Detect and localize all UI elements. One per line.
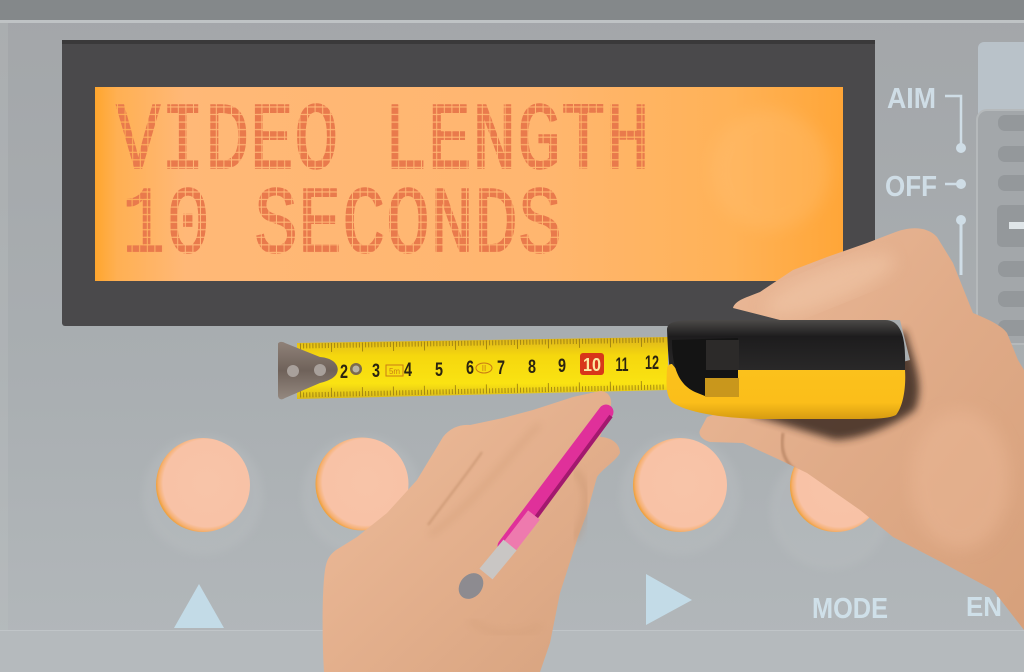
tape numbers: 8 xyxy=(528,357,536,378)
round buttons xyxy=(143,435,890,570)
tape oval mark: II xyxy=(482,364,486,373)
LCD text line 1: VIDEO LENGTH xyxy=(116,88,650,197)
button 1 xyxy=(156,438,250,532)
LCD text line 2: 10 SECONDS xyxy=(122,172,562,281)
side slider switch xyxy=(977,42,1024,344)
arrow up icon xyxy=(174,584,224,628)
tape numbers: 9 xyxy=(558,356,566,377)
tape numbers: 6 xyxy=(466,358,474,379)
MODE and EN labels xyxy=(812,591,1002,625)
tape numbers xyxy=(340,353,659,383)
tape numbers: 11 xyxy=(616,355,629,376)
MODE and EN labels: MODE xyxy=(812,593,888,625)
button 4 xyxy=(790,440,882,532)
tape oval mark xyxy=(476,363,492,373)
MODE and EN labels: EN xyxy=(966,591,1002,622)
tape numbers: 4 xyxy=(404,360,412,381)
tape body clip xyxy=(672,338,738,396)
pencil xyxy=(454,412,611,604)
left hand holding pencil xyxy=(323,391,620,672)
side switch labels: AIM OFF xyxy=(885,83,966,275)
tape numbers: 7 xyxy=(497,358,505,379)
arrow right icon xyxy=(646,574,692,625)
tape measure body xyxy=(667,320,905,419)
side switch labels: AIM OFF: OFF xyxy=(885,171,937,203)
button 2 xyxy=(316,438,408,530)
tape 5m mark: 5m xyxy=(389,367,400,376)
display bezel xyxy=(62,40,875,326)
tape numbers: 2 xyxy=(340,362,348,383)
right hand behind tape xyxy=(699,228,1024,630)
tape numbers: 5 xyxy=(435,360,443,381)
LCD screen xyxy=(95,87,843,281)
tape red 10 box: 10 xyxy=(583,355,601,375)
button 3 xyxy=(633,438,727,532)
tape numbers: 3 xyxy=(372,361,380,382)
tape ticks xyxy=(300,340,665,395)
side switch labels: AIM OFF: AIM xyxy=(887,83,936,115)
tape measure blade xyxy=(278,337,668,399)
tape 5m mark xyxy=(386,365,403,376)
tape metal hook xyxy=(278,342,362,399)
tape numbers: 12 xyxy=(645,353,659,374)
